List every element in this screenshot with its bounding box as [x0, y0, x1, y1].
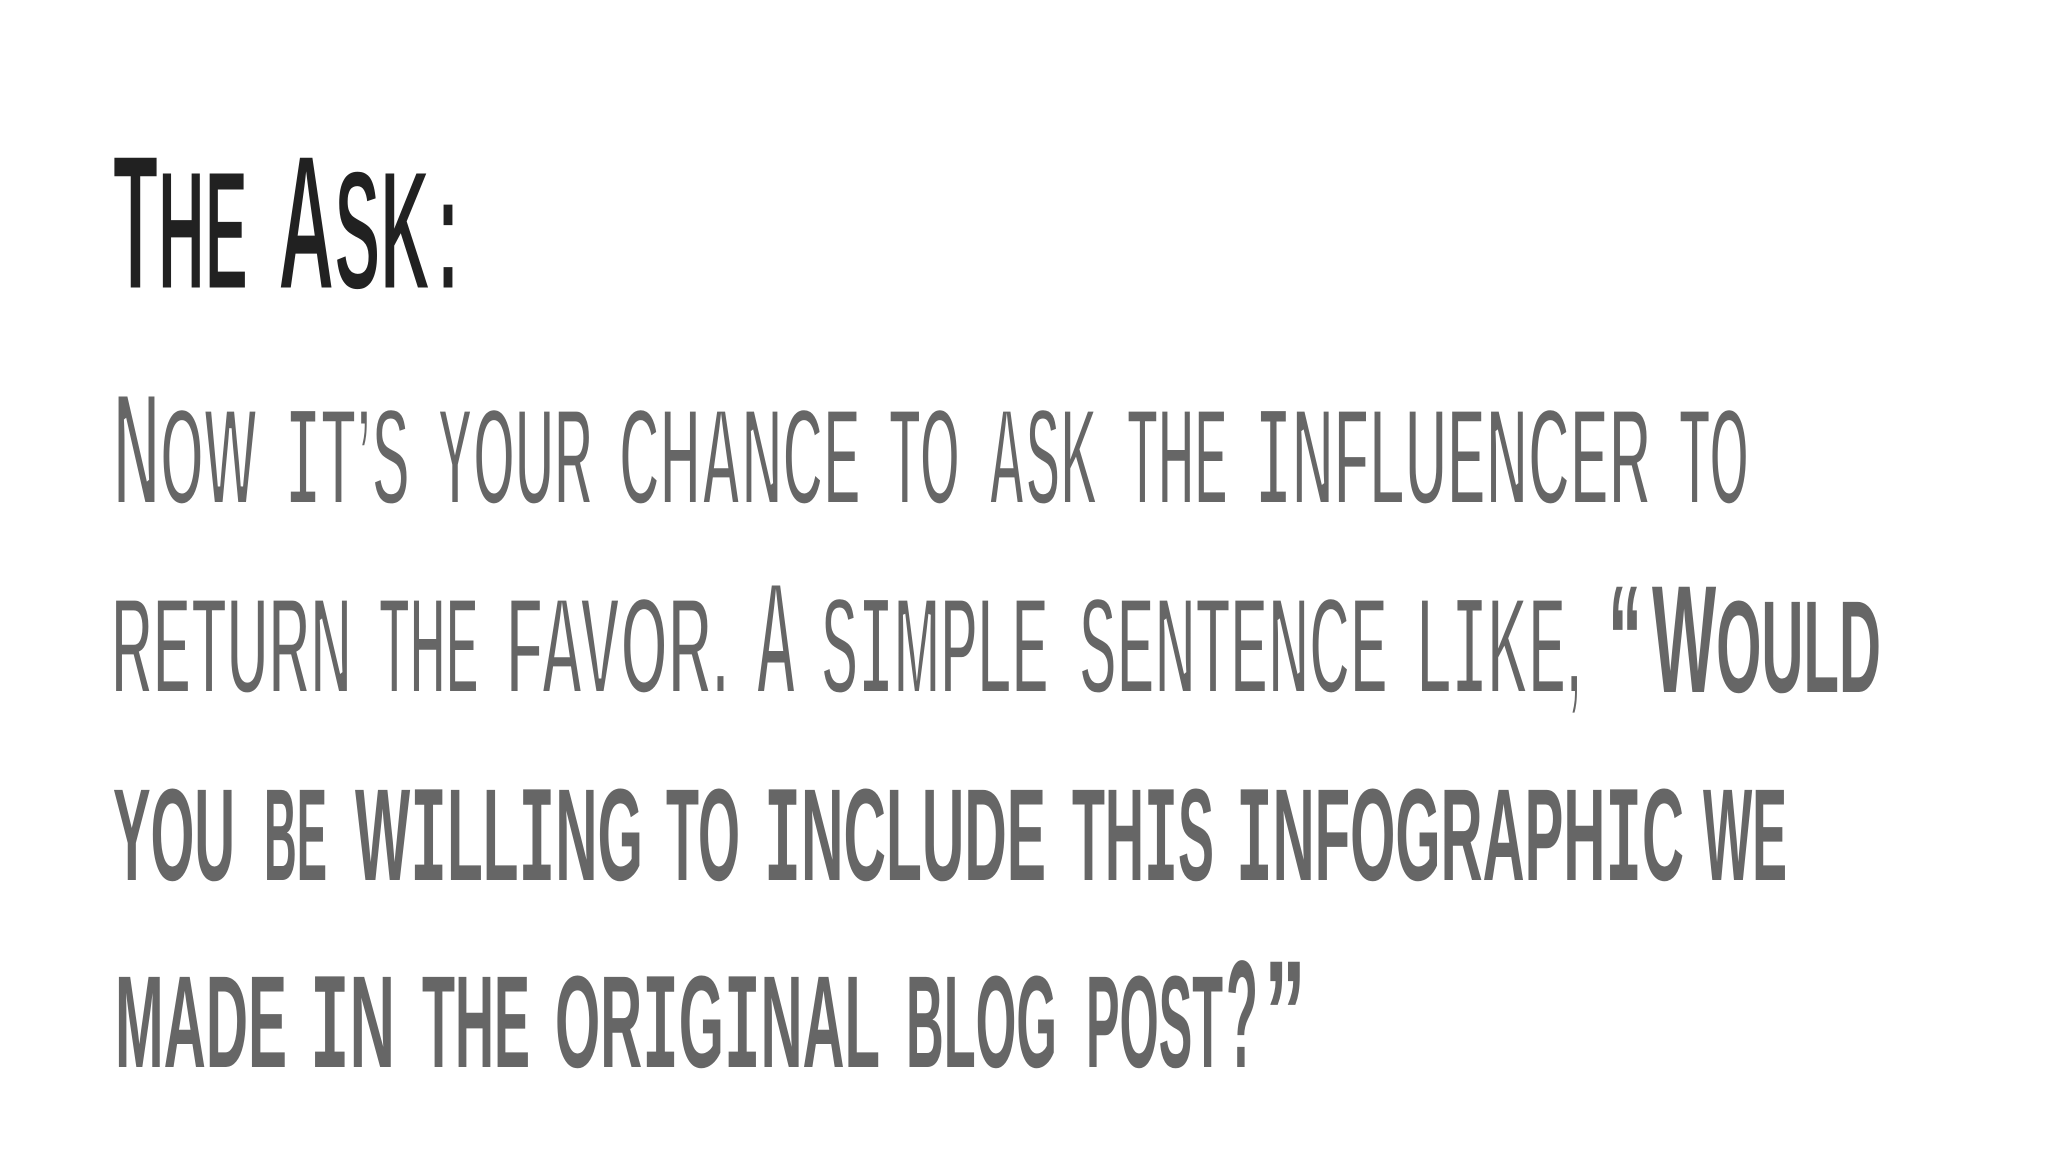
text line 1: YOUR: [437, 378, 593, 535]
text line 4: ORIGINAL: [555, 948, 880, 1109]
text line 3: WILLING: [355, 761, 643, 922]
body paragraph: [111, 359, 1881, 1109]
text line 3: INFOGRAPHIC: [1236, 761, 1684, 922]
text line 4: [115, 929, 1306, 1109]
text line 2: THE: [379, 567, 479, 724]
text line 4: MADE: [115, 948, 287, 1095]
text line 4: IN: [310, 948, 395, 1109]
text line 3: BE: [264, 761, 327, 908]
body paragraph: WE: [1703, 761, 1787, 908]
text line 4: ”: [1264, 929, 1306, 1100]
text line 2: “: [1608, 554, 1642, 725]
text line 4: POST: [1086, 948, 1223, 1095]
text line 4: THE: [422, 948, 530, 1095]
text line 1: THE: [1127, 378, 1228, 535]
text line 1: NOW: [113, 359, 257, 540]
title: THE: [113, 114, 248, 330]
text line 3: YOU: [113, 761, 235, 908]
text line 4: BLOG: [906, 948, 1057, 1095]
title: ASK: [278, 114, 430, 330]
text line 1: [113, 359, 1749, 550]
text line 3: INCLUDE: [764, 761, 1046, 922]
body paragraph: TO: [1679, 378, 1749, 535]
text line 3: TO: [666, 761, 740, 908]
text line 3: [113, 761, 1787, 922]
text line 1: CHANCE: [619, 378, 861, 535]
text line 3: THIS: [1072, 761, 1214, 922]
text line 2: LIKE,: [1417, 567, 1582, 739]
text line 2: [111, 548, 1881, 739]
text: :: [436, 136, 460, 326]
text line 2: SENTENCE: [1079, 567, 1388, 724]
text line 1: TO: [889, 378, 960, 535]
text line 2: FAVOR.: [506, 567, 729, 724]
text line 1: IT’S: [285, 378, 410, 550]
text line 2: SIMPLE: [821, 567, 1049, 739]
text line 4: ?: [1226, 929, 1258, 1100]
text line 2: RETURN: [111, 567, 352, 724]
text line 2: A: [755, 548, 797, 729]
text line 1: ASK: [988, 378, 1098, 535]
